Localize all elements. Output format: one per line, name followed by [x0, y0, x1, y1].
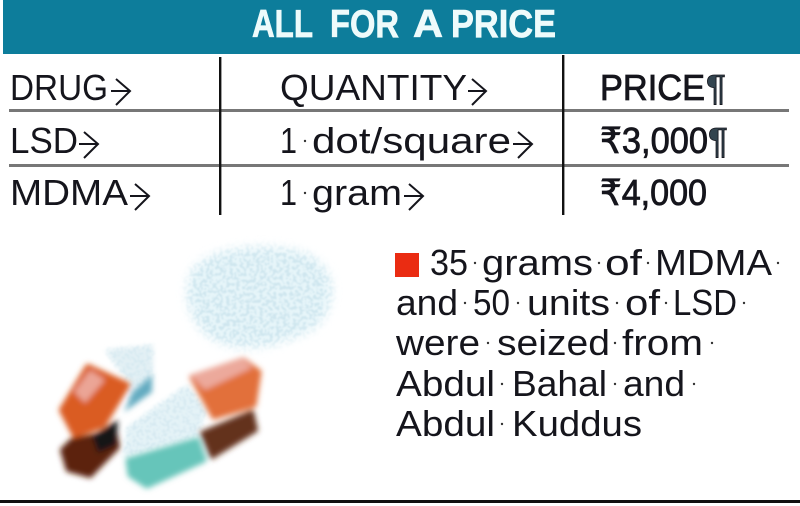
row: LSD: ₹3,000 [600, 120, 708, 161]
line 3: were [395, 322, 480, 363]
header row: DRUG [10, 67, 108, 108]
line 1: MDMA [655, 242, 772, 283]
line 3: from [622, 322, 703, 363]
row: MDMA: 1 [280, 172, 297, 213]
title: ALL [252, 3, 313, 46]
line 5 [396, 403, 642, 444]
line 3 [395, 322, 713, 363]
illustration: pills and powder [62, 248, 331, 486]
price table [9, 55, 789, 215]
header row [10, 67, 726, 108]
callout: seizure note [395, 242, 779, 444]
header row: PRICE [600, 67, 705, 108]
row: MDMA: gram [312, 172, 402, 213]
line 2 [396, 282, 745, 323]
line 1: of [605, 242, 643, 283]
line 5: Kuddus [512, 403, 642, 444]
line 2: 50 [473, 282, 510, 323]
line 4: and [623, 363, 685, 404]
line 2: units [527, 282, 610, 323]
title: FOR [330, 3, 399, 46]
line 2: of [625, 282, 661, 323]
title [252, 3, 556, 46]
row: LSD: LSD [10, 120, 78, 161]
row: LSD: ¶ [708, 120, 728, 161]
header row: ¶ [706, 67, 726, 108]
title: PRICE [451, 3, 556, 46]
row: LSD [10, 120, 728, 161]
row: LSD: dot/square [312, 120, 511, 161]
powder pile [188, 248, 331, 347]
line 5: Abdul [396, 403, 495, 444]
line 2: LSD [673, 282, 737, 323]
row: MDMA: MDMA [10, 172, 128, 213]
line 4: Bahal [512, 363, 607, 404]
line 4 [396, 363, 695, 404]
icon: red square bullet [395, 253, 419, 277]
line 4: Abdul [396, 363, 495, 404]
row: MDMA [10, 172, 707, 213]
title banner [3, 0, 800, 54]
bottom rule [0, 500, 800, 503]
line 2: and [396, 282, 458, 323]
line 1 [430, 242, 779, 283]
row: LSD: 1 [280, 120, 297, 161]
header row: QUANTITY [280, 67, 467, 108]
right capsule [123, 358, 259, 486]
row: MDMA: ₹4,000 [600, 172, 707, 213]
title: A [413, 3, 443, 46]
line 1: grams [482, 242, 593, 283]
line 3: seized [497, 322, 610, 363]
line 1: 35 [430, 242, 468, 283]
left capsule [62, 345, 153, 476]
